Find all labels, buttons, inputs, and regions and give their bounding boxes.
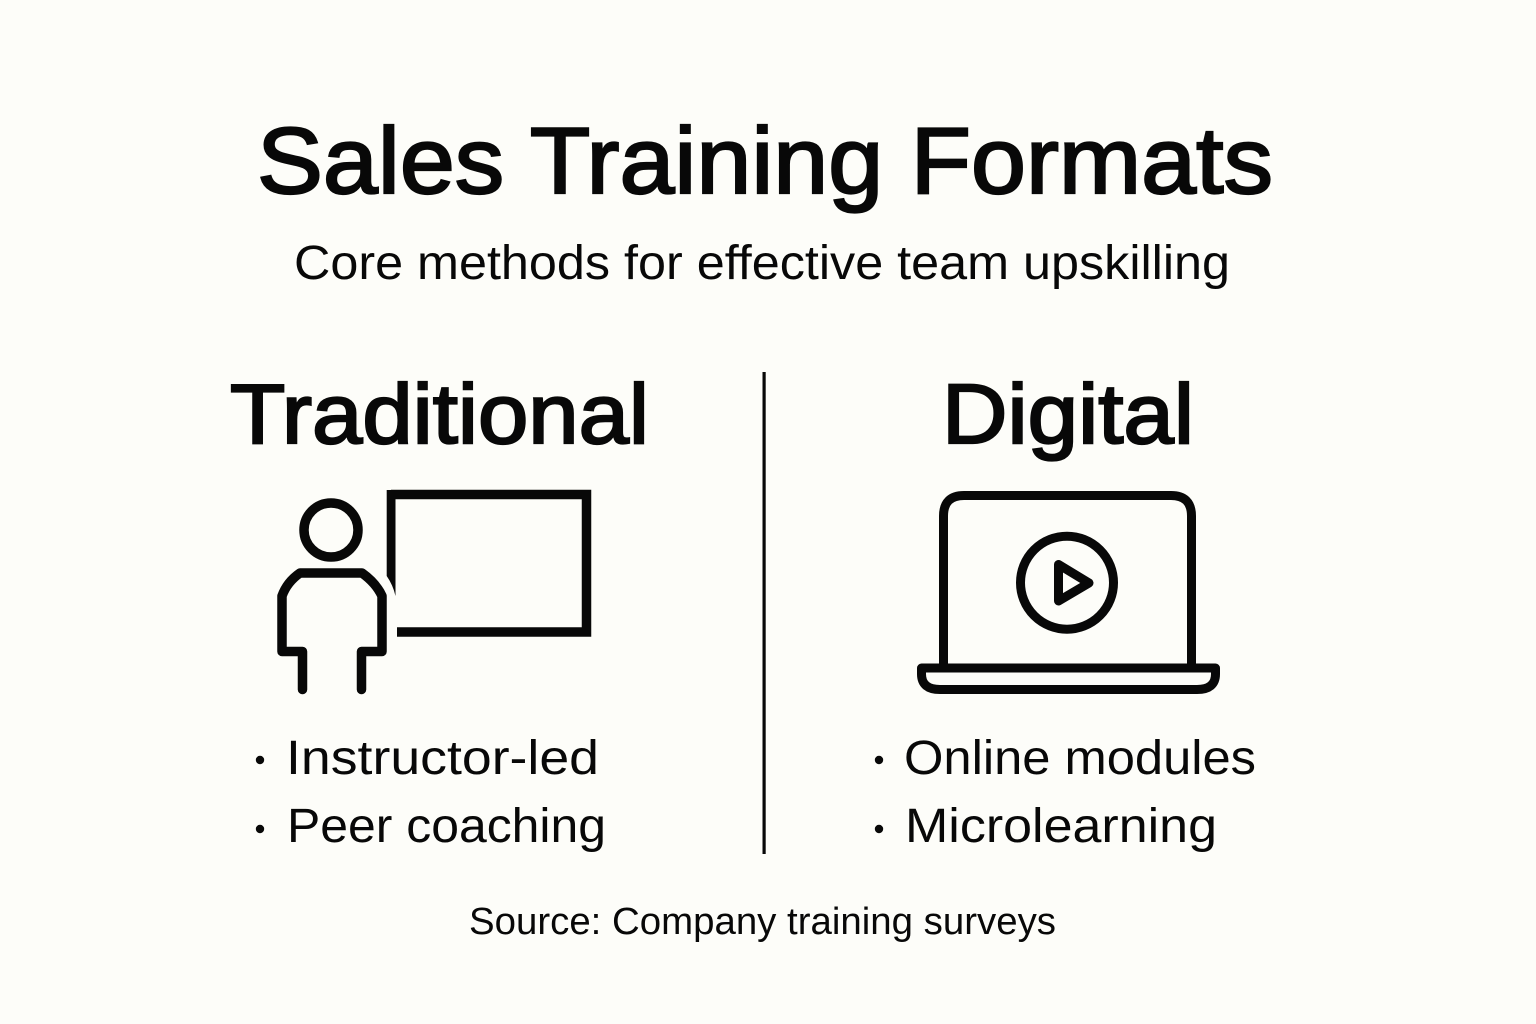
source note: Source: Company training surveys (469, 901, 1056, 943)
title: Sales Training Formats (257, 108, 1273, 213)
item: microlearning: Microlearning (905, 800, 1217, 853)
item: instructor-led: Instructor-led (286, 732, 599, 785)
icon: instructor at board (282, 490, 586, 690)
bullet (875, 825, 883, 833)
icon part: board frame (391, 494, 586, 632)
panel: digital (875, 367, 1256, 853)
icon part: base (922, 668, 1216, 690)
bullet (256, 825, 264, 833)
item: online modules: Online modules (904, 732, 1256, 785)
bullet (875, 756, 883, 764)
subtitle: Core methods for effective team upskilling (294, 237, 1230, 290)
panel: traditional (230, 367, 649, 853)
list: traditional methods (256, 732, 606, 853)
list: digital methods (875, 732, 1256, 853)
icon part: body (282, 573, 382, 690)
heading: digital: Digital (942, 367, 1194, 461)
icon part: play circle (1020, 536, 1114, 629)
icon part: play triangle (1058, 564, 1089, 601)
bullet (256, 756, 264, 764)
heading: traditional: Traditional (230, 367, 649, 461)
divider (762, 372, 766, 854)
icon part: screen (944, 496, 1192, 665)
icon part: board left edge (387, 490, 396, 596)
item: peer coaching: Peer coaching (287, 800, 606, 853)
icon part: head (304, 503, 358, 557)
icon: laptop with play button (922, 496, 1216, 690)
